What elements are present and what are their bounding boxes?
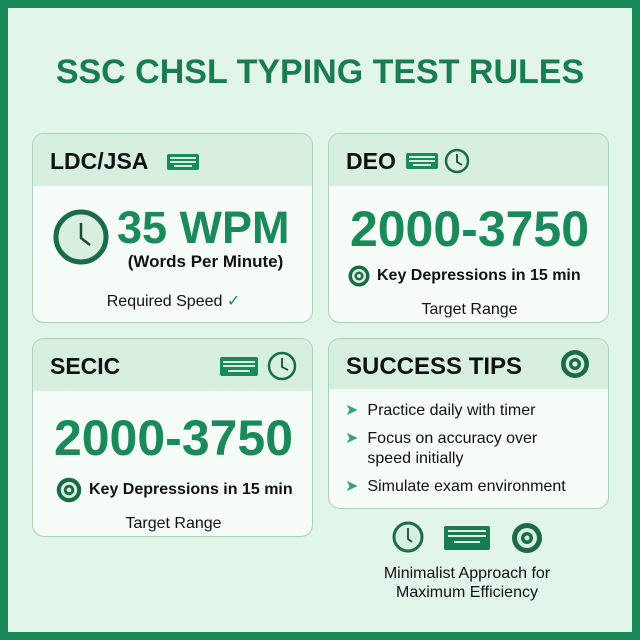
- tips list: Practice daily with timer: [367, 402, 535, 419]
- label: key depressions: Key Depressions in 15 min: [89, 481, 293, 498]
- value: 2000-3750: 2000-3750: [54, 410, 293, 466]
- header: SECIC: [33, 339, 312, 391]
- tips list: ➤: [345, 478, 358, 495]
- header: DEO: DEO: [346, 148, 396, 174]
- tips list: ➤: [345, 430, 358, 447]
- icon: keyboard: [167, 154, 199, 170]
- icon: clock: [54, 210, 108, 264]
- tips list: ➤: [345, 402, 358, 419]
- label: Required Speed: Required Speed ✓: [107, 293, 240, 310]
- tips list: Focus on accuracy over speed initially: [367, 430, 537, 467]
- panel: DEO: [328, 133, 609, 323]
- value: 35 WPM: 35 WPM: [117, 202, 290, 253]
- tips list: Simulate exam environment: [367, 478, 566, 495]
- header: SUCCESS TIPS: [329, 339, 608, 389]
- header: SUCCESS TIPS: SUCCESS TIPS: [346, 353, 522, 380]
- label: key depressions: Key Depressions in 15 min: [377, 267, 581, 284]
- icons: keyboard and clock: [220, 352, 296, 380]
- label: Target Range: Target Range: [421, 301, 518, 318]
- label: key depressions: [56, 478, 293, 502]
- header: LDC/JSA: [33, 134, 312, 186]
- panel: success tips: [328, 338, 609, 509]
- caption: Minimalist Approach for Maximum Efficiency: [384, 565, 550, 601]
- icons row: [392, 522, 542, 553]
- title: SSC CHSL TYPING TEST RULES: [56, 53, 584, 91]
- header: LDC/JSA: LDC/JSA: [50, 148, 148, 174]
- value: 2000-3750: 2000-3750: [350, 201, 589, 257]
- icon: target: [561, 350, 589, 378]
- tips list: [345, 402, 566, 495]
- icons: keyboard and clock: [406, 148, 470, 174]
- panel: LDC/JSA: [32, 133, 313, 323]
- panel: SECIC: [32, 338, 313, 537]
- subtext: (Words Per Minute): [128, 252, 283, 271]
- header: DEO: [329, 134, 608, 186]
- label: Target Range: Target Range: [125, 515, 222, 532]
- header: SECIC: SECIC: [50, 353, 120, 379]
